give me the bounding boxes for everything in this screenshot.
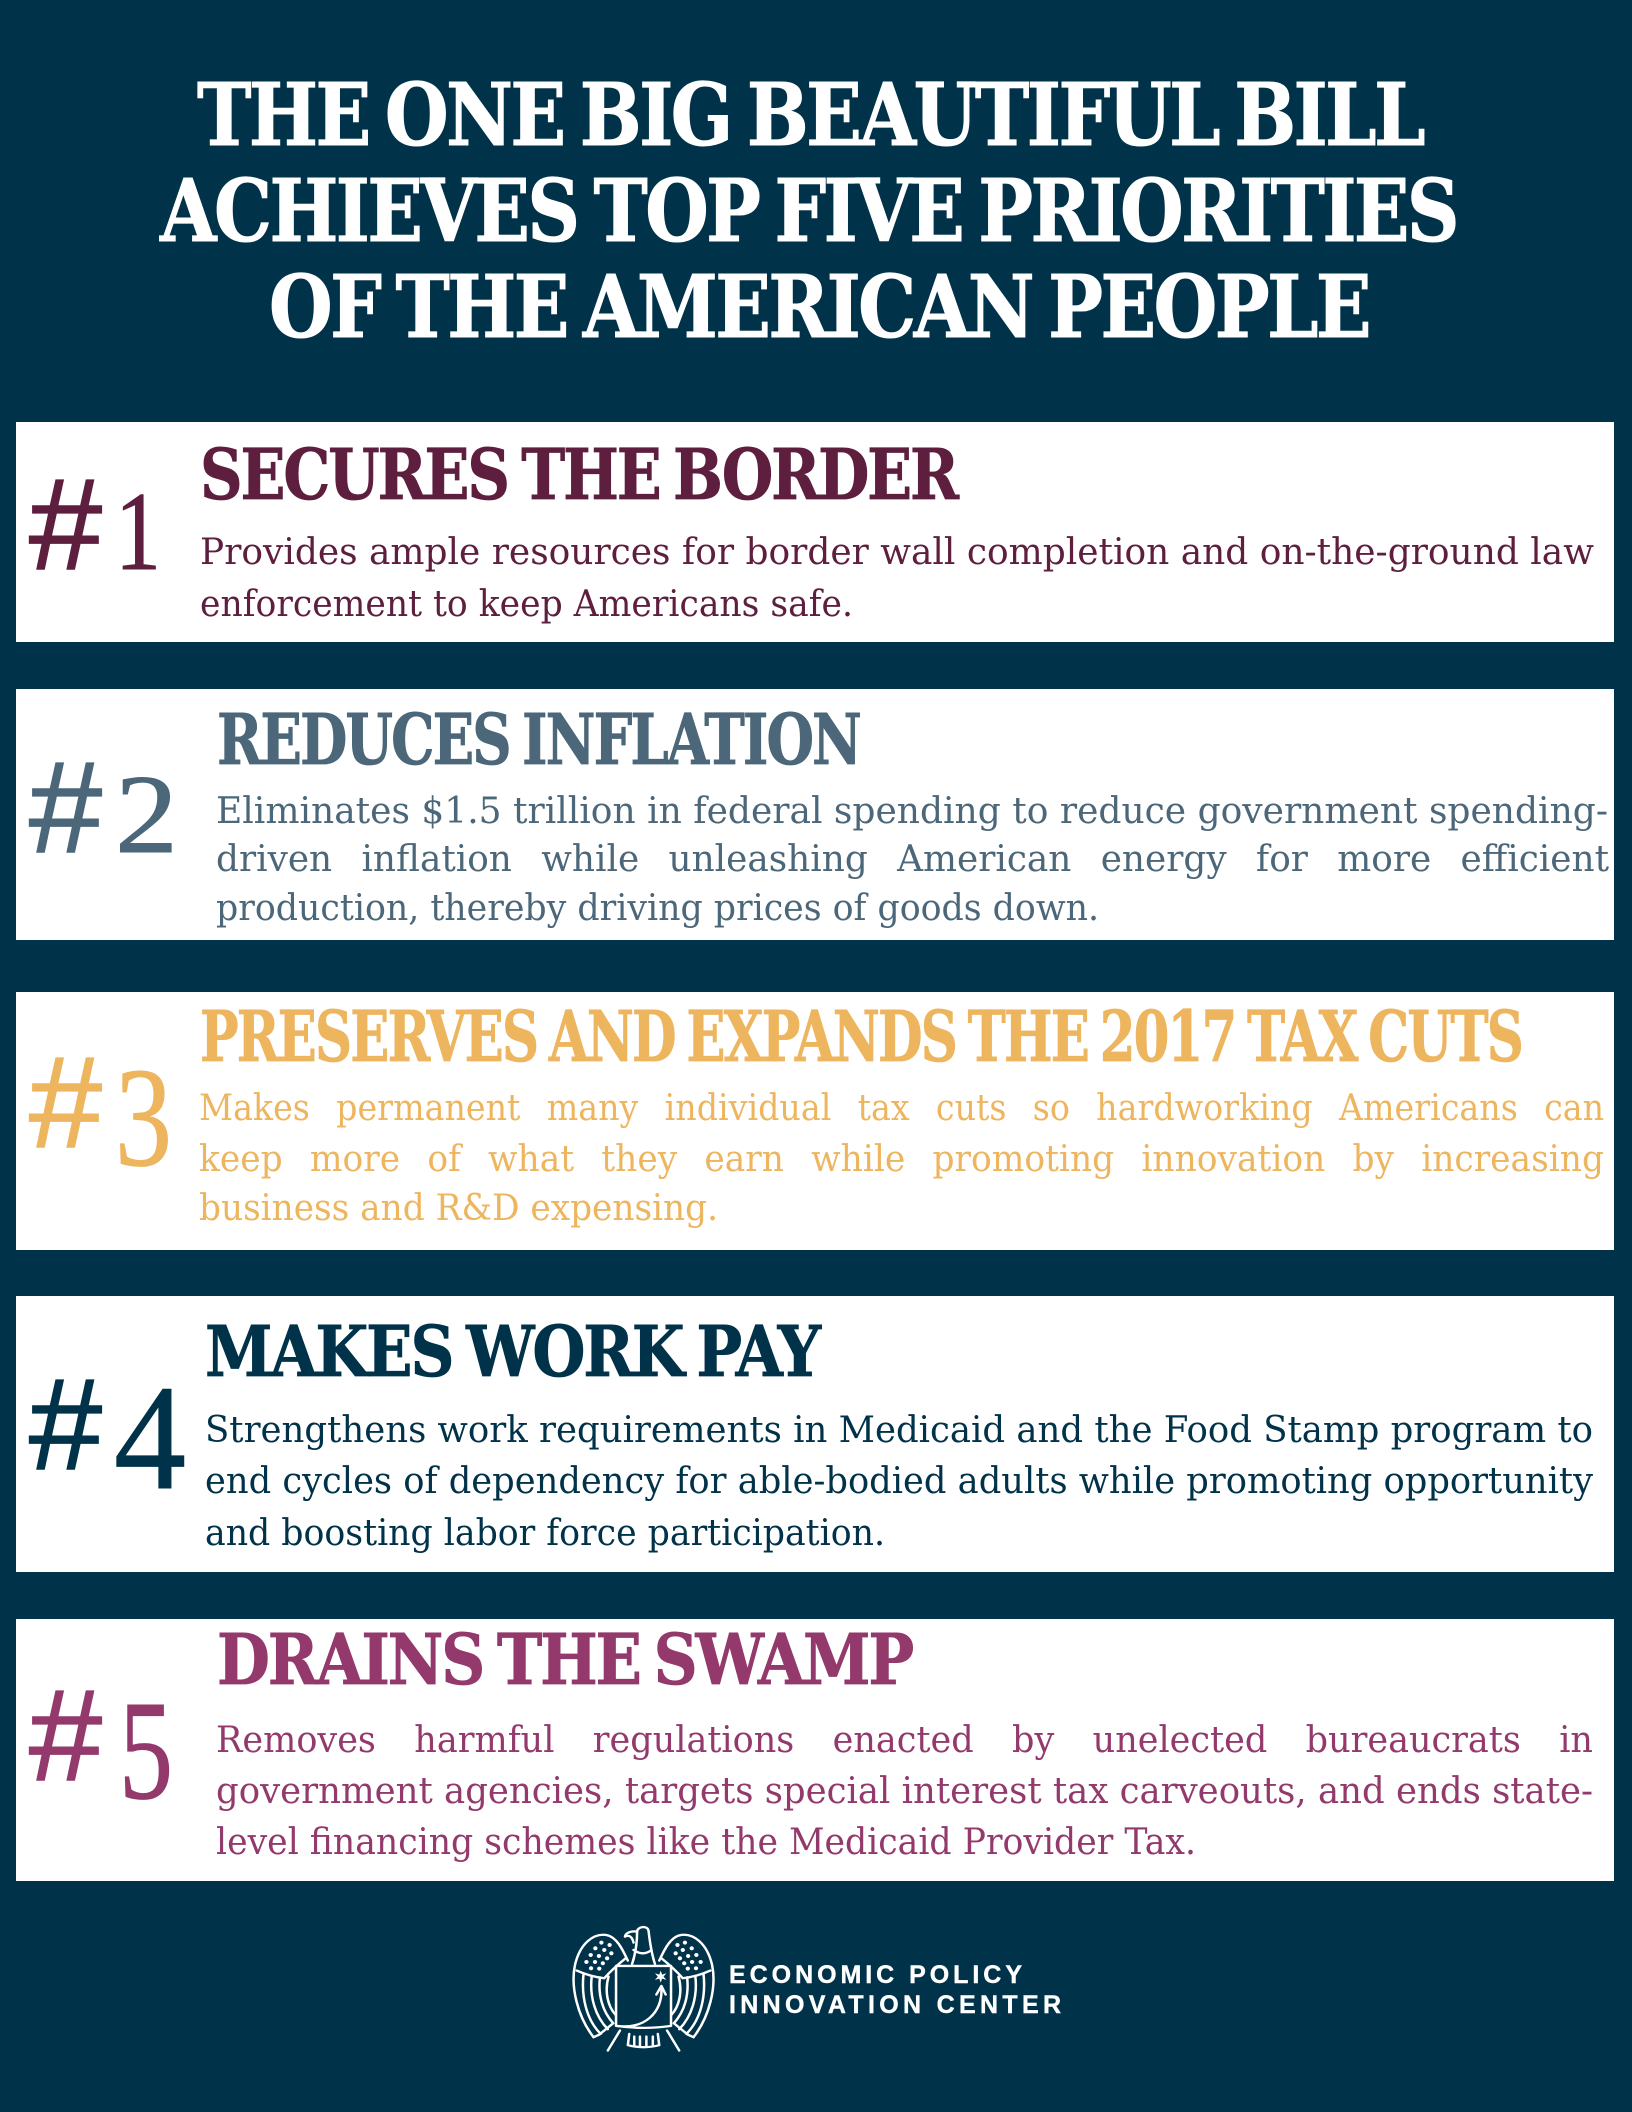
- number 2: [29, 734, 178, 880]
- title: OF THE AMERICAN PEOPLE: [269, 257, 1369, 358]
- logo: Economic Policy Innovation Center: [574, 1927, 1061, 2051]
- number 1: 1: [115, 470, 161, 594]
- number 5: [29, 1662, 173, 1829]
- body text 1: [200, 532, 1594, 625]
- body text 4: end cycles of dependency for able-bodied adults while promoting opportunity: [205, 1461, 1594, 1502]
- body text 3: business and R&D expensing.: [199, 1188, 718, 1229]
- body text 2: Eliminates $1.5 trillion in federal spending to reduce government spending-: [216, 791, 1608, 832]
- body text 5: Removes harmful regulations enacted by unelected bureaucrats in: [216, 1720, 1593, 1761]
- heading 5: DRAINS THE SWAMP: [217, 1618, 913, 1701]
- number 4: 4: [114, 1355, 186, 1521]
- panel: priority 1, secures the border: [16, 422, 1614, 642]
- panel: priority 3, preserves and expands the 2017 tax cuts: [16, 992, 1614, 1250]
- logo wordmark: INNOVATION CENTER: [729, 1991, 1061, 2019]
- number 3: [29, 1029, 172, 1196]
- number 4: #: [29, 1351, 102, 1497]
- body text 3: [199, 1088, 1604, 1229]
- number 5: 5: [119, 1671, 173, 1829]
- body text 4: [205, 1410, 1594, 1554]
- heading 1: SECURES THE BORDER: [200, 433, 960, 516]
- body text 3: keep more of what they earn while promoting innovation by increasing: [199, 1139, 1604, 1180]
- number 1: [29, 451, 161, 597]
- number 2: #: [29, 734, 102, 880]
- panel: priority 4, makes work pay: [16, 1296, 1614, 1572]
- logo wordmark: ECONOMIC POLICY: [729, 1961, 1022, 1989]
- title: THE ONE BIG BEAUTIFUL BILL: [197, 65, 1424, 166]
- body text 5: government agencies, targets special interest tax carveouts, and ends state-: [216, 1771, 1593, 1812]
- body text 5: level financing schemes like the Medicaid Provider Tax.: [216, 1822, 1196, 1863]
- number 2: 2: [115, 753, 178, 877]
- icon: eagle with shield: [574, 1927, 713, 2051]
- number 1: #: [29, 451, 102, 597]
- number 3: 3: [115, 1038, 172, 1196]
- title: [159, 65, 1457, 358]
- body text 5: [216, 1720, 1593, 1863]
- heading 4: MAKES WORK PAY: [205, 1310, 822, 1393]
- body text 1: enforcement to keep Americans safe.: [200, 584, 853, 625]
- number 4: [29, 1351, 186, 1521]
- panel: priority 2, reduces inflation: [16, 689, 1614, 940]
- body text 2: [216, 791, 1610, 929]
- number 5: #: [29, 1662, 102, 1808]
- body text 2: driven inflation while unleashing American energy for more efficient: [216, 839, 1610, 880]
- logo wordmark: [729, 1961, 1061, 2019]
- body text 1: Provides ample resources for border wall completion and on-the-ground law: [200, 532, 1594, 573]
- body text 4: Strengthens work requirements in Medicaid and the Food Stamp program to: [205, 1410, 1593, 1451]
- body text 4: and boosting labor force participation.: [205, 1513, 885, 1554]
- panel: priority 5, drains the swamp: [16, 1618, 1614, 1881]
- body text 2: production, thereby driving prices of goods down.: [216, 888, 1099, 929]
- number 3: #: [29, 1029, 102, 1175]
- heading 2: REDUCES INFLATION: [217, 698, 860, 781]
